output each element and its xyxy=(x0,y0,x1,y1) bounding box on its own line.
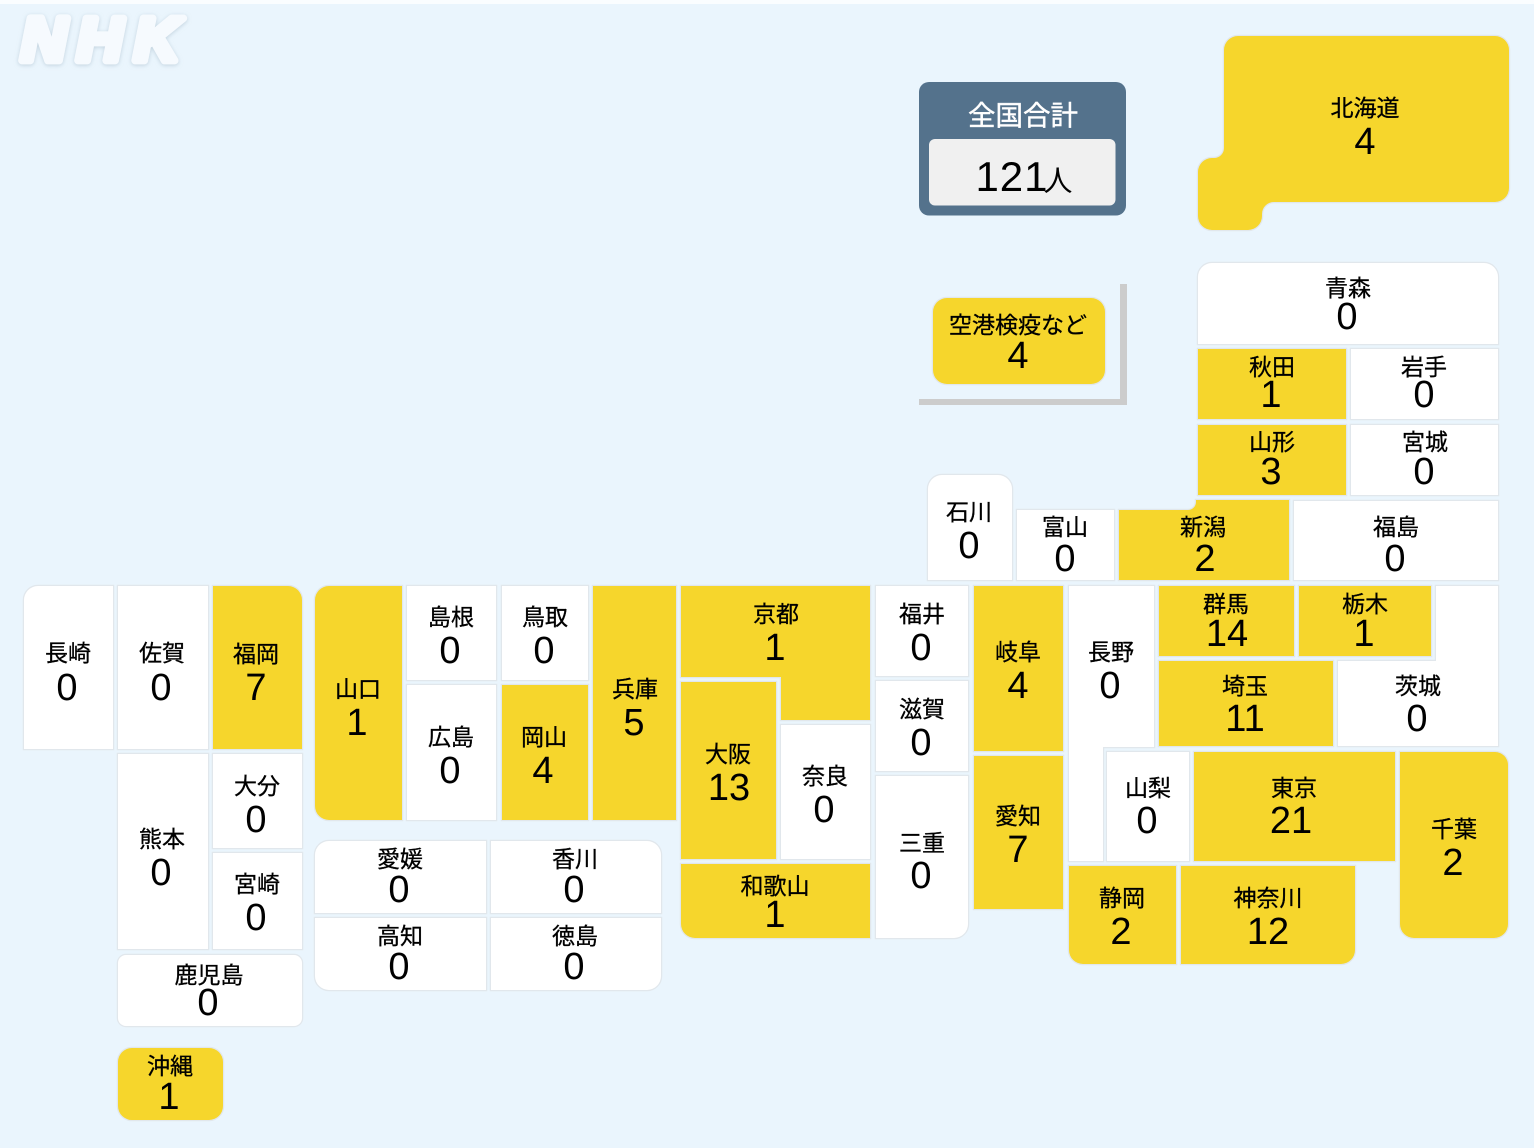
national total panel xyxy=(919,82,1126,216)
Miyagi: 0 xyxy=(1413,451,1435,493)
Saga: 佐賀 xyxy=(139,640,185,666)
Okayama: 4 xyxy=(532,750,554,792)
Fukushima: 福島 xyxy=(1373,514,1419,540)
Gifu xyxy=(974,586,1063,751)
Hiroshima: 0 xyxy=(439,750,461,792)
Tottori: 鳥取 xyxy=(522,604,568,630)
Kochi xyxy=(315,918,486,990)
Mie: 三重 xyxy=(899,830,945,856)
Toyama: 0 xyxy=(1054,538,1076,580)
Gunma xyxy=(1159,586,1294,656)
Hokkaido: 4 xyxy=(1354,121,1376,163)
Nara xyxy=(781,725,870,859)
Kagoshima: 0 xyxy=(197,982,219,1024)
Aomori xyxy=(1198,263,1498,344)
Tokushima: 徳島 xyxy=(552,923,598,949)
Ishikawa: 石川 xyxy=(946,499,992,525)
Yamagata: 山形 xyxy=(1249,429,1295,455)
Toyama xyxy=(1017,510,1114,580)
Oita xyxy=(213,754,302,848)
Oita: 大分 xyxy=(234,773,280,799)
national total panel: 全国合計 xyxy=(968,100,1078,131)
Akita: 1 xyxy=(1260,374,1282,416)
Okayama: 岡山 xyxy=(521,724,567,750)
national total panel: 人 xyxy=(1043,166,1073,198)
airport quarantine panel: 4 xyxy=(1007,335,1029,377)
Saitama: 埼玉 xyxy=(1222,673,1268,699)
Nagano xyxy=(1069,586,1154,861)
Tochigi: 栃木 xyxy=(1342,591,1388,617)
Miyazaki xyxy=(213,853,302,949)
Shizuoka: 2 xyxy=(1110,911,1132,953)
Kagawa: 香川 xyxy=(552,846,598,872)
Kanagawa: 12 xyxy=(1247,911,1289,953)
Oita: 0 xyxy=(245,799,267,841)
Nara: 奈良 xyxy=(802,763,848,789)
Nagasaki: 0 xyxy=(56,667,78,709)
Ehime: 愛媛 xyxy=(377,846,423,872)
Ibaraki xyxy=(1338,586,1498,746)
Osaka: 13 xyxy=(708,767,750,809)
Tokyo xyxy=(1194,752,1395,861)
Ibaraki: 茨城 xyxy=(1395,673,1441,699)
Ibaraki: 0 xyxy=(1406,698,1428,740)
Toyama: 富山 xyxy=(1042,514,1088,540)
Shiga xyxy=(876,681,968,771)
Shiga: 滋賀 xyxy=(899,696,945,722)
Nagasaki xyxy=(24,586,113,749)
Hokkaido: 北海道 xyxy=(1330,95,1400,121)
Yamanashi: 山梨 xyxy=(1125,775,1171,801)
Shizuoka: 静岡 xyxy=(1099,885,1145,911)
Aomori: 青森 xyxy=(1325,275,1371,301)
Nagasaki: 長崎 xyxy=(45,640,91,666)
Ishikawa: 0 xyxy=(958,525,980,567)
Kyoto: 京都 xyxy=(753,601,799,627)
Gunma: 群馬 xyxy=(1203,591,1249,617)
Okayama xyxy=(502,685,588,820)
Yamaguchi: 山口 xyxy=(335,676,381,702)
Kagawa xyxy=(491,841,661,913)
Yamanashi xyxy=(1107,752,1189,861)
Hyogo xyxy=(593,586,676,820)
Saga: 0 xyxy=(150,667,172,709)
Akita: 秋田 xyxy=(1249,354,1295,380)
Ehime xyxy=(315,841,486,913)
national total panel: 121 xyxy=(975,153,1049,200)
airport quarantine panel: 空港検疫など xyxy=(949,312,1087,338)
Okinawa: 1 xyxy=(158,1076,180,1118)
logo: NHK: NHK xyxy=(21,6,184,74)
Chiba xyxy=(1400,752,1508,938)
Kyoto: 1 xyxy=(764,627,786,669)
Tokyo: 東京 xyxy=(1271,775,1317,801)
Hokkaido xyxy=(1198,36,1509,230)
Saitama: 11 xyxy=(1225,698,1265,740)
Nagano: 長野 xyxy=(1088,639,1134,665)
Osaka: 大阪 xyxy=(705,741,751,767)
Gifu: 岐阜 xyxy=(995,639,1041,665)
Yamagata xyxy=(1198,425,1346,495)
Shizuoka xyxy=(1069,866,1176,964)
Tokushima: 0 xyxy=(563,946,585,988)
Mie: 0 xyxy=(910,855,932,897)
Iwate: 0 xyxy=(1413,374,1435,416)
Osaka xyxy=(681,682,776,859)
Shimane xyxy=(407,586,496,680)
Kagawa: 0 xyxy=(563,869,585,911)
Wakayama: 1 xyxy=(764,894,786,936)
Hiroshima: 広島 xyxy=(428,724,474,750)
Fukuoka xyxy=(213,586,302,749)
Fukushima: 0 xyxy=(1384,538,1406,580)
Yamaguchi xyxy=(315,586,402,820)
Hiroshima xyxy=(407,685,496,820)
Niigata: 2 xyxy=(1194,538,1216,580)
Niigata: 新潟 xyxy=(1180,514,1226,540)
Yamaguchi: 1 xyxy=(346,702,368,744)
Yamanashi: 0 xyxy=(1136,800,1158,842)
Shimane: 島根 xyxy=(428,604,474,630)
Shimane: 0 xyxy=(439,630,461,672)
Gunma: 14 xyxy=(1206,613,1248,655)
Fukuoka: 7 xyxy=(245,667,267,709)
Kochi: 高知 xyxy=(377,923,423,949)
Tottori xyxy=(502,586,588,680)
Niigata xyxy=(1119,500,1289,580)
Miyazaki: 宮崎 xyxy=(234,871,280,897)
Akita xyxy=(1198,349,1346,419)
Aichi: 7 xyxy=(1007,829,1029,871)
Iwate: 岩手 xyxy=(1401,354,1447,380)
Gifu: 4 xyxy=(1007,665,1029,707)
Fukui: 0 xyxy=(910,627,932,669)
Kagoshima xyxy=(118,955,302,1026)
Tokyo: 21 xyxy=(1270,800,1312,842)
Mie xyxy=(876,776,968,938)
Tottori: 0 xyxy=(533,630,555,672)
Chiba: 2 xyxy=(1442,842,1464,884)
Aomori: 0 xyxy=(1336,296,1358,338)
Aichi: 愛知 xyxy=(995,803,1041,829)
Wakayama xyxy=(681,864,870,938)
Okinawa: 沖縄 xyxy=(147,1053,193,1079)
Kochi: 0 xyxy=(388,946,410,988)
Kyoto xyxy=(681,586,870,720)
Tochigi xyxy=(1299,586,1431,656)
Fukui xyxy=(876,586,968,676)
Fukushima xyxy=(1294,501,1498,580)
Kanagawa: 神奈川 xyxy=(1234,885,1302,911)
Shiga: 0 xyxy=(910,722,932,764)
Hyogo: 5 xyxy=(623,702,645,744)
Miyazaki: 0 xyxy=(245,897,267,939)
Yamagata: 3 xyxy=(1260,451,1282,493)
Tokushima xyxy=(491,918,661,990)
Kumamoto: 0 xyxy=(150,852,172,894)
Ishikawa xyxy=(928,475,1012,580)
Iwate xyxy=(1351,349,1498,419)
Kagoshima: 鹿児島 xyxy=(174,962,244,988)
Kumamoto: 熊本 xyxy=(139,826,185,852)
Saitama xyxy=(1159,661,1333,746)
Okinawa xyxy=(118,1048,223,1120)
Kanagawa xyxy=(1181,866,1355,964)
Kumamoto xyxy=(118,754,208,949)
Aichi xyxy=(974,756,1063,909)
Hyogo: 兵庫 xyxy=(612,676,658,702)
Fukui: 福井 xyxy=(899,601,945,627)
Nara: 0 xyxy=(813,789,835,831)
Miyagi xyxy=(1351,425,1498,495)
Wakayama: 和歌山 xyxy=(740,873,810,899)
Saga xyxy=(118,586,208,749)
airport quarantine panel xyxy=(919,284,1127,405)
Ehime: 0 xyxy=(388,869,410,911)
Nagano: 0 xyxy=(1099,665,1121,707)
Miyagi: 宮城 xyxy=(1402,429,1448,455)
Tochigi: 1 xyxy=(1353,613,1375,655)
Chiba: 千葉 xyxy=(1431,816,1477,842)
Fukuoka: 福岡 xyxy=(233,641,279,667)
